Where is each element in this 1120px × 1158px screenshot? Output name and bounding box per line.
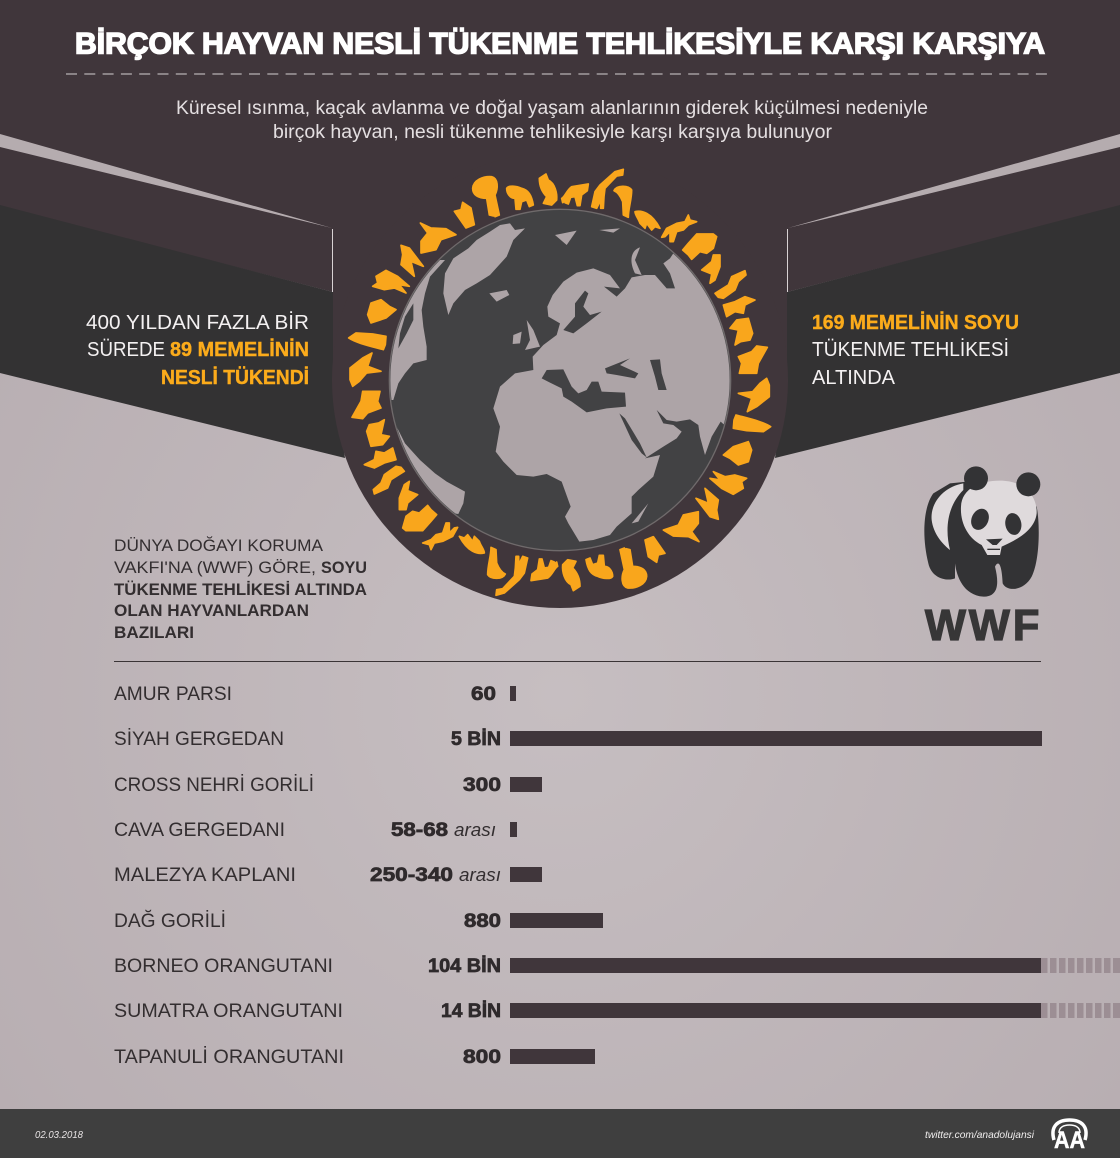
row: Malezya kaplanı: arası — [459, 865, 501, 885]
intro text: birçok hayvan, nesli tükenme tehlikesiyle karşı karşıya bulunuyor — [273, 122, 833, 143]
row: Borneo orangutanı — [114, 954, 1120, 977]
row: Siyah gergedan: SİYAH GERGEDAN — [114, 727, 284, 750]
WWF panda logo — [924, 466, 1040, 650]
footer twitter handle: twitter.com/anadolujansi — [925, 1129, 1035, 1141]
row: Cava gergedanı: 58-68 — [391, 819, 448, 841]
row: Borneo orangutanı: 104 BİN — [428, 954, 501, 977]
footer date: 02.03.2018 — [35, 1130, 83, 1141]
chart intro text: DÜNYA DOĞAYI KORUMA — [114, 536, 324, 555]
row: Malezya kaplanı: MALEZYA KAPLANI — [114, 864, 296, 886]
row: Dağ gorili: DAĞ GORİLİ — [114, 909, 226, 932]
row: Cross Nehri gorili — [114, 773, 542, 796]
animal silhouettes ring — [349, 169, 771, 595]
right callout: 169 endangered mammals: TÜKENME TEHLİKESİ — [812, 338, 1009, 361]
row: Malezya kaplanı — [114, 864, 542, 886]
left callout: 89 extinct mammals: 89 MEMELİNİN — [170, 338, 309, 361]
WWF wordmark: WWF — [925, 602, 1039, 650]
panda — [924, 466, 1040, 597]
row: Sumatra orangutanı — [114, 999, 1120, 1022]
row: Sumatra orangutanı: 14 BİN — [441, 999, 501, 1022]
row: Cross Nehri gorili: 300 — [463, 774, 501, 796]
left light ribbon — [0, 134, 332, 292]
row: Dağ gorili — [114, 909, 603, 932]
globe disc — [332, 152, 788, 608]
left callout: 89 extinct mammals: SÜREDE — [87, 339, 165, 361]
globe map — [388, 208, 732, 552]
header panel — [0, 0, 1120, 380]
chart intro text: TÜKENME TEHLİKESİ ALTINDA — [114, 580, 367, 599]
row: Amur parsı: 60 — [471, 683, 496, 705]
row: Amur parsı — [114, 683, 516, 705]
bar chart — [114, 683, 1120, 1068]
chart intro text: BAZILARI — [114, 623, 194, 642]
left callout: 89 extinct mammals: NESLİ TÜKENDİ — [161, 366, 309, 389]
row: Tapanuli orangutanı: TAPANULİ ORANGUTANI — [114, 1045, 344, 1068]
left dark band — [0, 205, 345, 458]
row: Sumatra orangutanı: SUMATRA ORANGUTANI — [114, 1000, 343, 1022]
intro text: Küresel ısınma, kaçak avlanma ve doğal yaşam alanlarının giderek küçülmesi nedeniyle — [176, 98, 928, 119]
globe with animal ring — [349, 169, 771, 595]
chart intro text — [114, 536, 367, 642]
left callout: 89 extinct mammals: 400 YILDAN FAZLA BİR — [86, 311, 309, 334]
right light ribbon — [788, 134, 1120, 292]
row: Borneo orangutanı: BORNEO ORANGUTANI — [114, 955, 333, 977]
row: Siyah gergedan: 5 BİN — [451, 727, 501, 750]
row: Tapanuli orangutanı — [114, 1045, 595, 1068]
row: Amur parsı: AMUR PARSI — [114, 683, 232, 705]
row: Cava gergedanı: CAVA GERGEDANI — [114, 819, 285, 841]
right dark band — [775, 205, 1120, 458]
title: BİRÇOK HAYVAN NESLİ TÜKENME TEHLİKESİYLE KARŞI KARŞIYA — [75, 28, 1045, 60]
chart intro text: SOYU — [321, 558, 367, 577]
row: Cava gergedanı — [114, 819, 517, 841]
chart intro text: VAKFI'NA (WWF) GÖRE, — [114, 558, 316, 577]
row: Tapanuli orangutanı: 800 — [463, 1046, 501, 1068]
row: Malezya kaplanı: 250-340 — [370, 864, 453, 886]
row: Dağ gorili: 880 — [464, 910, 501, 932]
intro text — [176, 98, 928, 143]
right callout: 169 endangered mammals — [812, 311, 1019, 389]
right callout: 169 endangered mammals: ALTINDA — [812, 367, 896, 389]
right callout: 169 endangered mammals: 169 MEMELİNİN SOYU — [812, 311, 1019, 334]
chart intro text: OLAN HAYVANLARDAN — [114, 601, 309, 620]
left callout: 89 extinct mammals — [86, 311, 309, 389]
row: Cross Nehri gorili: CROSS NEHRİ GORİLİ — [114, 773, 314, 796]
row: Cava gergedanı: arası — [454, 820, 496, 840]
footer bar — [0, 1109, 1120, 1158]
icon: Anadolu Agency logo: AA — [1054, 1127, 1085, 1154]
row: Siyah gergedan — [114, 727, 1042, 750]
